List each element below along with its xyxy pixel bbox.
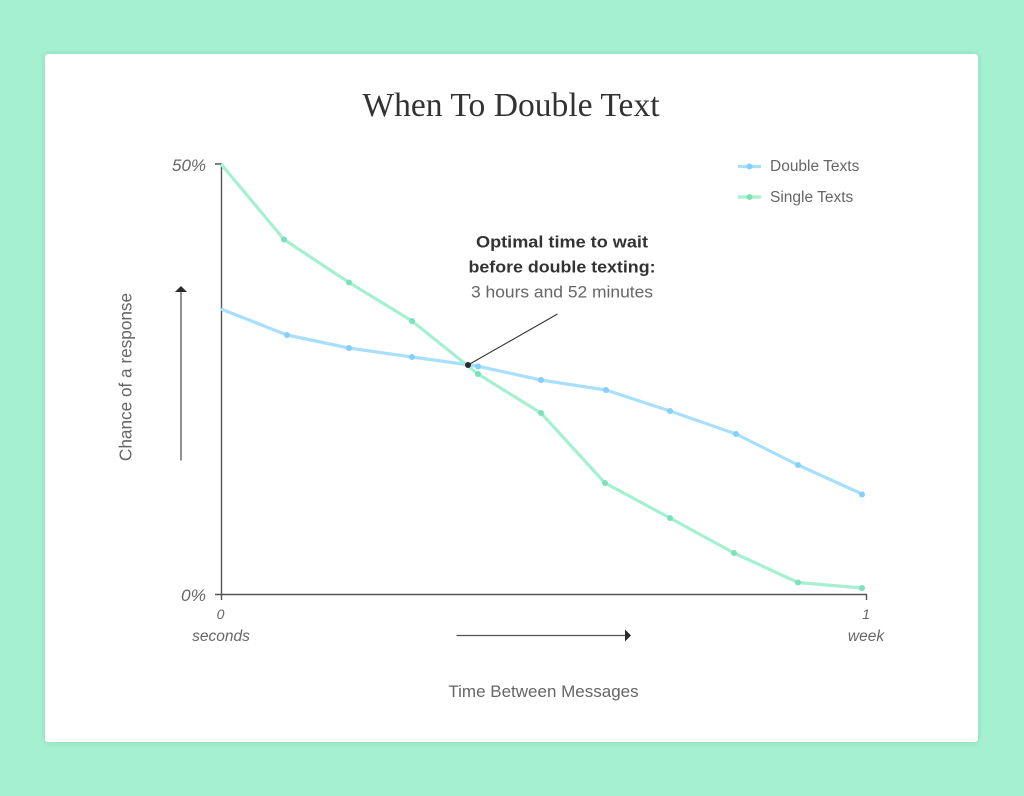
- callout: optimal time: before double texting:: [468, 258, 656, 276]
- x axis label: 1 week: [848, 606, 885, 645]
- x axis label: 0 seconds: 0: [217, 606, 225, 622]
- title: When To Double Text: [362, 87, 660, 124]
- x axis title: Time Between Messages: [448, 682, 639, 701]
- chart axes: [215, 164, 866, 600]
- arrow: right: [456, 630, 631, 642]
- y axis title: Chance of a response: [116, 293, 136, 461]
- y axis label: 50%: 50%: [172, 157, 206, 175]
- arrow: up: [175, 286, 187, 460]
- legend item: single texts: Single Texts: [770, 189, 854, 206]
- legend: [738, 158, 860, 206]
- legend item: double texts: Double Texts: [770, 158, 860, 175]
- line series: single texts: [221, 164, 865, 591]
- x axis label: 1 week: week: [848, 628, 885, 645]
- callout: optimal time: Optimal time to wait: [476, 232, 648, 252]
- x axis label: 0 seconds: seconds: [192, 628, 250, 645]
- y axis label: 0%: 0%: [181, 587, 206, 605]
- callout leader line and marker: [465, 314, 558, 368]
- line series: double texts: [221, 309, 865, 498]
- x axis label: 0 seconds: [192, 606, 250, 645]
- callout: optimal time: 3 hours and 52 minutes: [471, 282, 653, 302]
- panel: white chart card: [45, 54, 978, 742]
- callout: optimal time: [468, 232, 656, 302]
- x axis label: 1 week: 1: [862, 606, 870, 622]
